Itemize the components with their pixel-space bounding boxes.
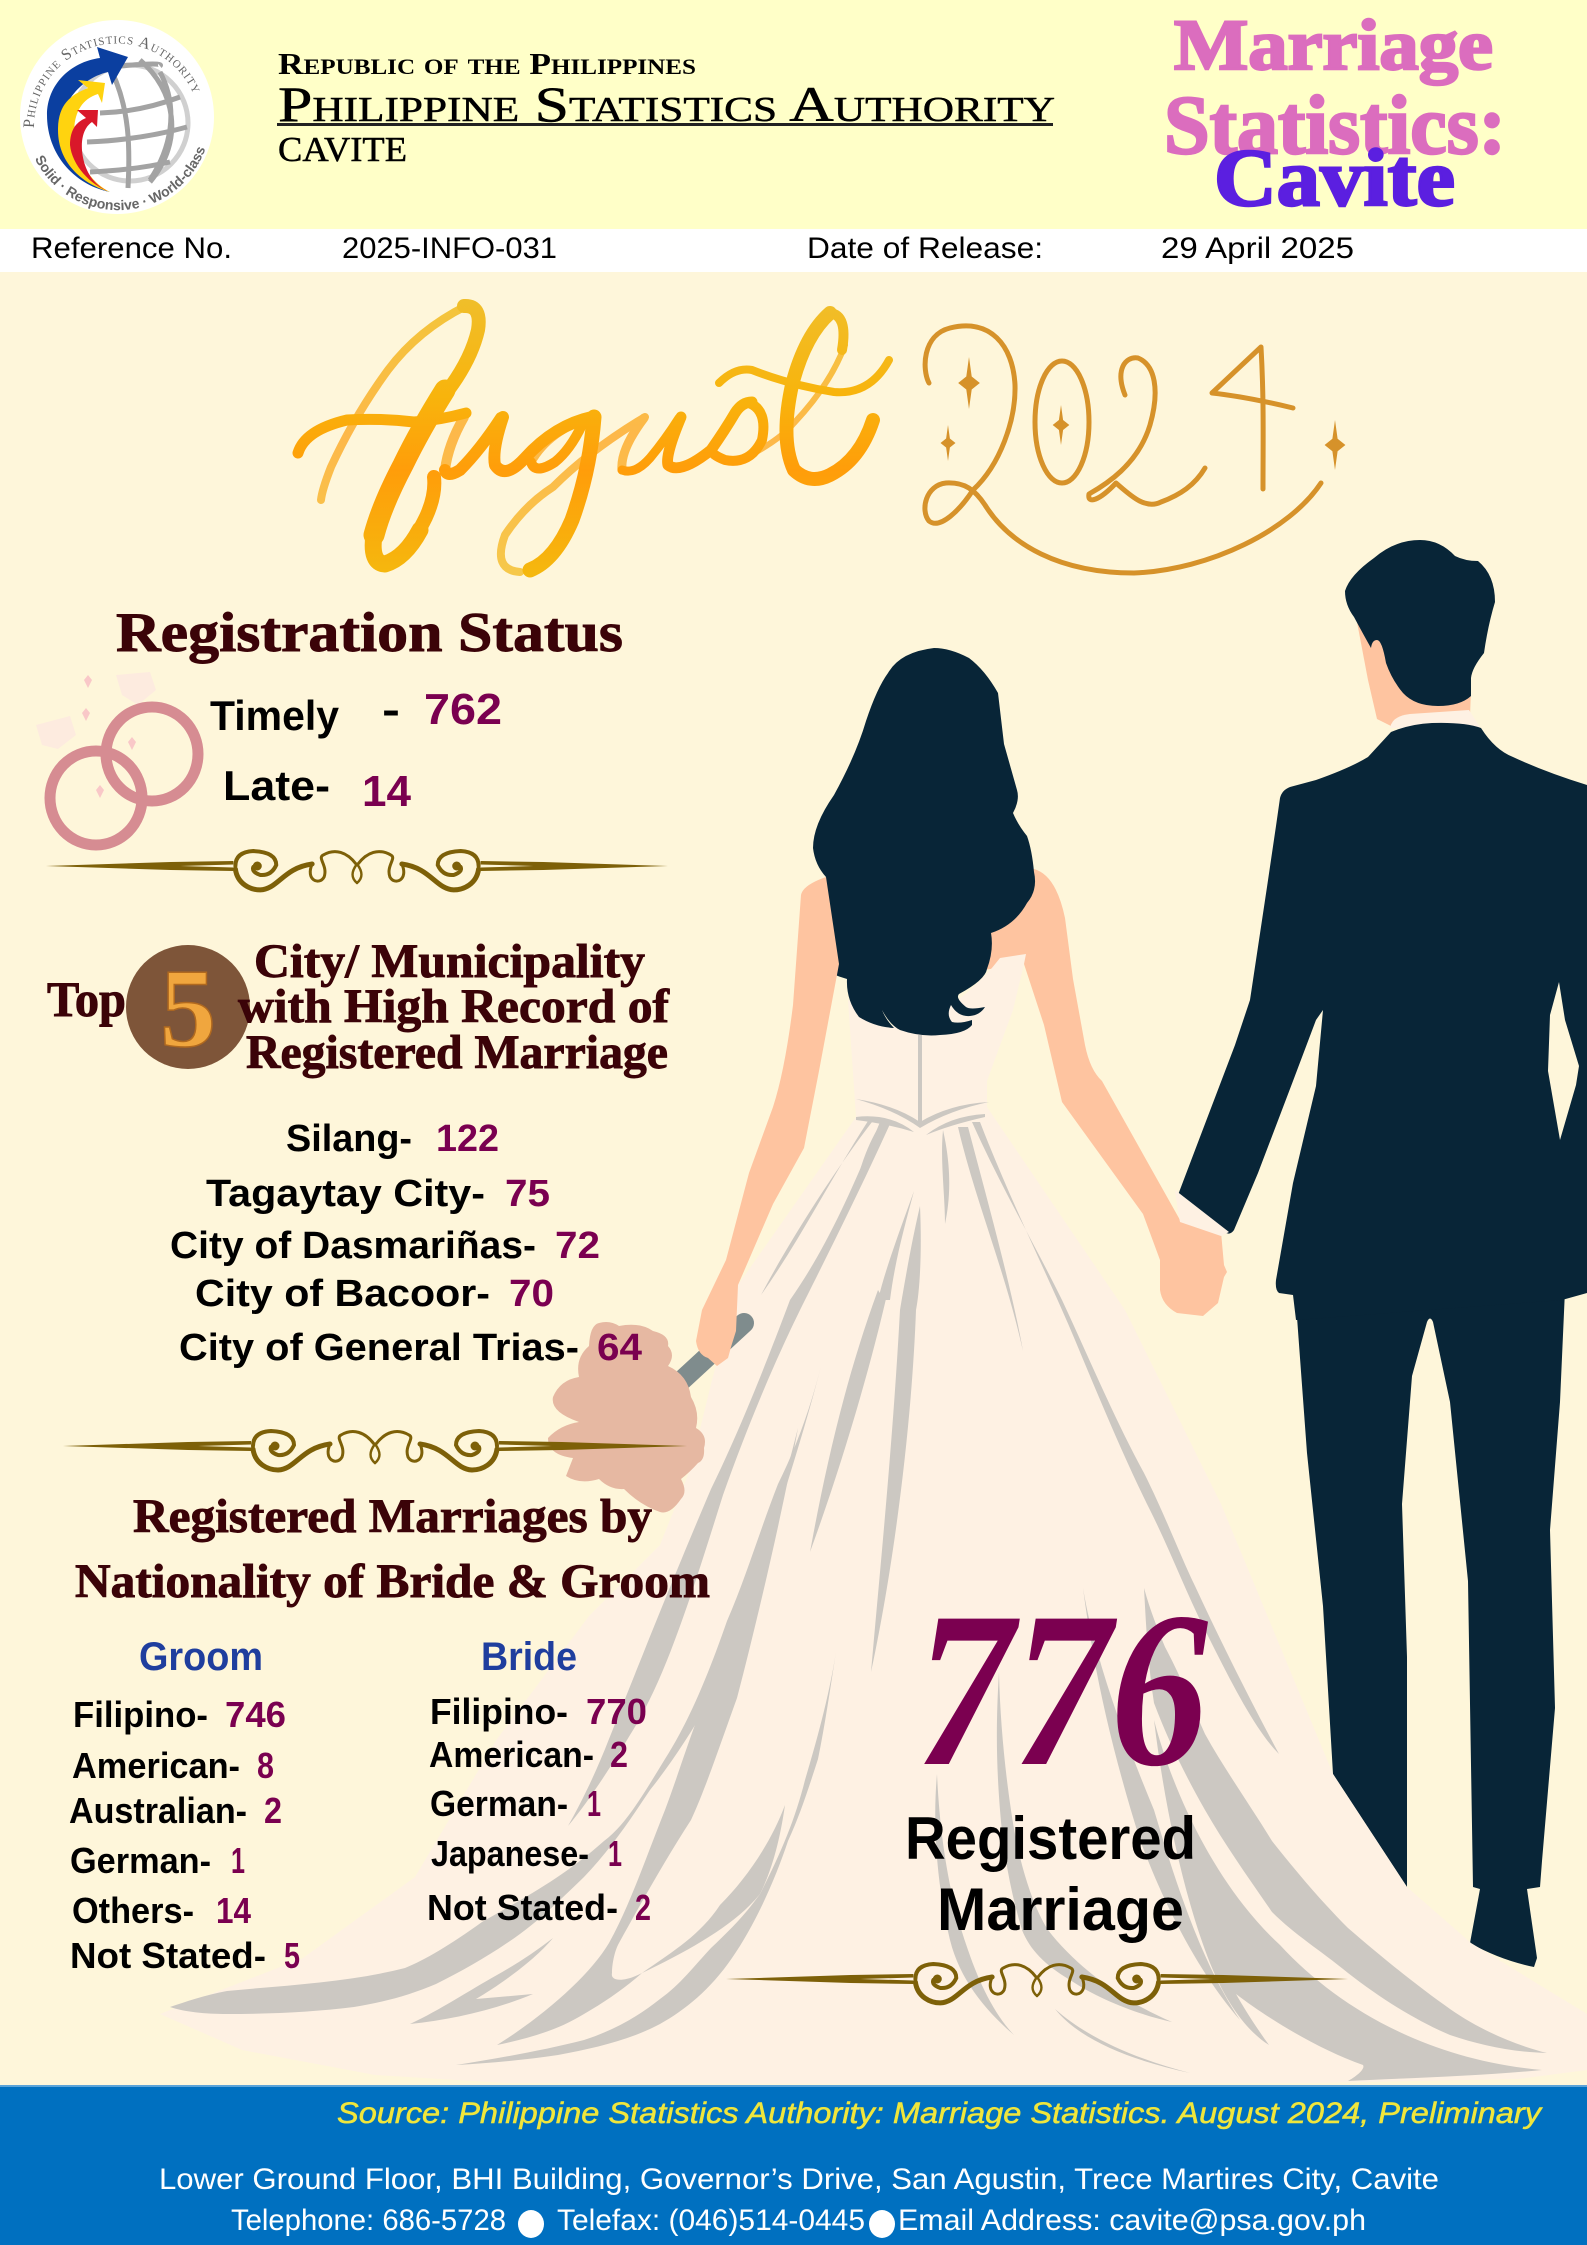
contact line: Email Address: cavite@psa.gov.ph <box>898 2204 1366 2237</box>
bride column: Bride <box>481 1635 577 1679</box>
title: Marriage Statistics Cavite <box>1164 5 1506 223</box>
callout: 776 registered marriage: Marriage <box>937 1876 1184 1943</box>
groom column: 2 <box>264 1790 282 1831</box>
callout: 776 registered marriage <box>905 1567 1208 1943</box>
city list: 72 <box>555 1225 600 1267</box>
heading: Registered Marriage <box>246 1026 668 1079</box>
title: Marriage Statistics Cavite: Cavite <box>1214 132 1455 223</box>
bride column: Not Stated- <box>427 1887 618 1928</box>
groom column: 14 <box>216 1890 251 1931</box>
August lettering <box>298 306 889 572</box>
bouquet <box>548 1322 744 1512</box>
contact line <box>231 2204 1366 2238</box>
dress folds <box>170 1035 1547 2081</box>
panel: nationality of bride and groom <box>69 1490 710 1976</box>
callout: 776 registered marriage: Registered <box>905 1805 1196 1872</box>
Timely count <box>210 685 502 739</box>
groom <box>1177 540 1587 1967</box>
groom column: American- <box>72 1745 240 1786</box>
bride column: 2 <box>635 1887 651 1928</box>
address: Lower Ground Floor, BHI Building, Governor’s Drive, San Agustin, Trece Martires City, Cavite <box>159 2163 1439 2196</box>
agency name: Republic of the Philippines <box>278 46 696 81</box>
Late count: Late- <box>223 762 330 809</box>
source line: Source: Philippine Statistics Authority: Marriage Statistics. August 2024, Preliminary <box>337 2097 1543 2130</box>
groom column: Not Stated- <box>70 1935 266 1976</box>
contact line: Telephone: 686-5728 <box>231 2204 506 2237</box>
groom column: Australian- <box>69 1790 247 1831</box>
bride column: Filipino- <box>430 1691 568 1732</box>
city list <box>170 1118 642 1369</box>
groom column: Groom <box>139 1635 263 1679</box>
title: Marriage Statistics Cavite: Marriage <box>1174 5 1493 85</box>
bride column: 1 <box>587 1783 601 1824</box>
bride and groom illustration <box>160 540 1587 2084</box>
groom column: 5 <box>284 1935 300 1976</box>
PSA logo: Solid · Responsive · World-class <box>36 147 205 210</box>
groom column: Filipino- <box>73 1694 208 1735</box>
heading: August 2024 <box>298 306 1345 573</box>
city list: 64 <box>597 1327 642 1369</box>
reference strip: 29 April 2025 <box>1161 232 1354 265</box>
city list: Silang- <box>286 1118 412 1160</box>
groom hair <box>1345 540 1495 706</box>
bride column: 2 <box>610 1734 628 1775</box>
Timely count: Timely <box>210 692 340 739</box>
city list: 75 <box>505 1173 550 1215</box>
Timely count: 762 <box>424 685 502 734</box>
reference strip: Date of Release: <box>807 232 1043 265</box>
Timely count: - <box>382 686 400 733</box>
panel: registration status <box>36 602 623 845</box>
groom column: 8 <box>257 1745 274 1786</box>
city list: Tagaytay City- <box>206 1173 485 1215</box>
bride left arm <box>696 877 839 1366</box>
contact line: Telefax: (046)514-0445 <box>557 2204 865 2237</box>
groom trousers <box>1295 1290 1565 1967</box>
PSA logo <box>20 20 214 214</box>
header band <box>0 0 1587 229</box>
bride column <box>427 1635 651 1928</box>
panel: top 5 city/municipality <box>47 935 670 1369</box>
groom column: 746 <box>225 1694 286 1735</box>
Late count <box>223 762 412 816</box>
reference strip <box>0 229 1587 272</box>
2024 lettering <box>925 326 1321 573</box>
bride hair <box>808 648 1035 1035</box>
PSA logo: Philippine Statistics Authority <box>23 36 200 128</box>
heading <box>75 1490 710 1608</box>
heading: Registered Marriages by <box>133 1490 652 1543</box>
icon: wooden number 5 badge <box>126 945 250 1071</box>
title: Marriage Statistics Cavite: Statistics: <box>1164 79 1506 172</box>
city list: City of General Trias- <box>179 1327 579 1369</box>
Late count: 14 <box>362 767 412 816</box>
city list: 70 <box>509 1273 554 1315</box>
heading: City/ Municipality <box>254 935 645 988</box>
icon: wedding rings <box>36 672 198 845</box>
groom column <box>69 1635 300 1976</box>
heading <box>47 935 670 1079</box>
bride back and right arm <box>840 869 1227 1316</box>
bride column: 1 <box>608 1833 622 1874</box>
city list: City of Dasmariñas- <box>170 1225 536 1267</box>
heading: Registration Status <box>116 602 623 664</box>
agency name: CAVITE <box>278 130 407 169</box>
callout: 776 registered marriage: 776 <box>916 1567 1208 1813</box>
groom column: Others- <box>72 1890 194 1931</box>
bride column: German- <box>430 1783 568 1824</box>
agency name: Philippine Statistics Authority <box>278 76 1055 132</box>
city list: 122 <box>436 1118 499 1160</box>
groom column: German- <box>70 1840 211 1881</box>
agency name <box>277 46 1055 169</box>
bride column: Japanese- <box>431 1833 589 1874</box>
icon: wooden number 5 badge: 5 <box>160 947 216 1071</box>
city list: City of Bacoor- <box>195 1273 490 1315</box>
bride column: 770 <box>586 1691 647 1732</box>
wedding dress <box>160 954 1587 2084</box>
heading: with High Record of <box>238 980 670 1033</box>
reference strip: 2025-INFO-031 <box>342 232 557 265</box>
heading: Nationality of Bride & Groom <box>75 1555 710 1608</box>
groom column: 1 <box>231 1840 245 1881</box>
bride column: American- <box>429 1734 594 1775</box>
groom jacket <box>1177 723 1587 1320</box>
reference strip: Reference No. <box>31 232 232 265</box>
heading: Top <box>47 971 126 1027</box>
footer <box>0 2085 1587 2245</box>
